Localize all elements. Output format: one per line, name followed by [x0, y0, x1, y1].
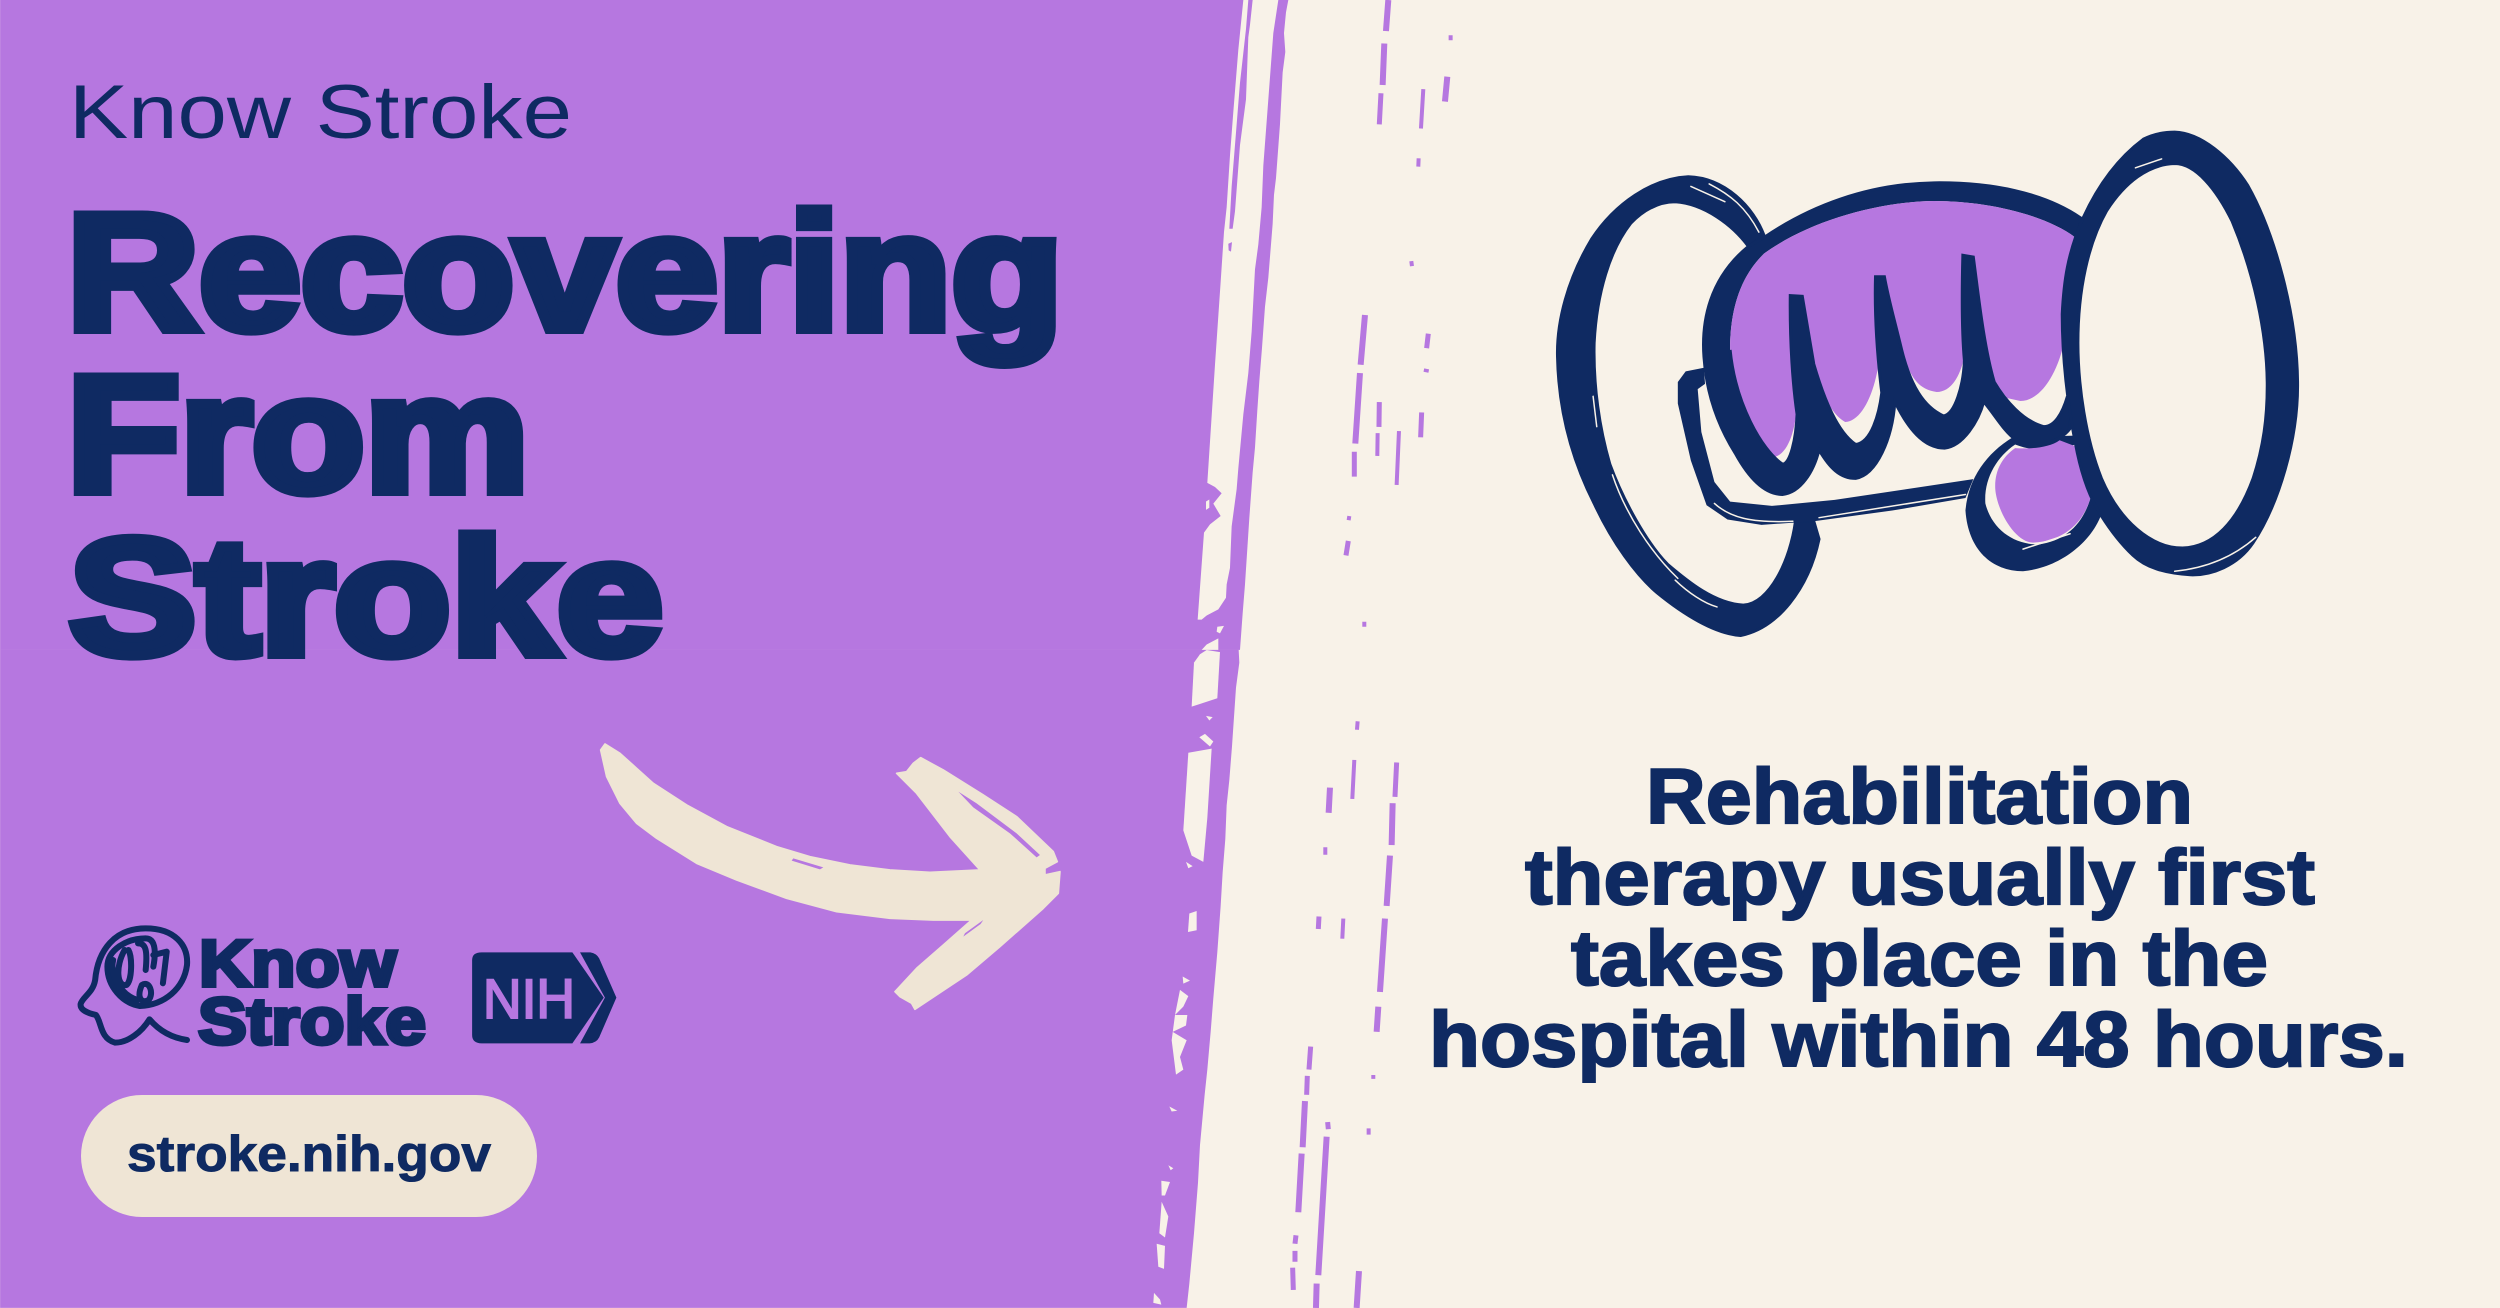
caption: rehabilitation therapy message — [1429, 752, 2408, 1083]
title: Recovering From Stroke: From — [67, 342, 529, 526]
purple brush flecks upper right of divider — [1346, 0, 1451, 627]
logo wordmark — [198, 926, 426, 1058]
panel: purple left background with brushed edge — [0, 0, 1288, 1308]
caption: rehabilitation therapy message: Rehabilitation — [1646, 752, 2193, 840]
url pill: stroke.nih.gov — [127, 1126, 491, 1182]
right weight — [2062, 132, 2298, 575]
purple brush flecks lower right of divider — [1293, 721, 1397, 1308]
thumb — [1965, 436, 2101, 571]
eyebrow: Know Stroke: Know Stroke — [69, 70, 572, 155]
icon: head with scribble brain — [81, 928, 187, 1043]
logo wordmark: Know — [199, 926, 397, 1000]
url pill — [81, 1095, 537, 1217]
logo: NIH — [472, 952, 616, 1043]
title: Recovering From Stroke: Recovering — [67, 180, 1063, 364]
title: Recovering From Stroke: Stroke — [69, 505, 663, 689]
caption: rehabilitation therapy message: therapy usually first — [1525, 833, 2315, 921]
caption: rehabilitation therapy message: hospital within 48 hours. — [1429, 995, 2408, 1083]
hand with fingers — [1704, 183, 2081, 494]
left weight — [1557, 177, 1819, 636]
brushed cream gap in divider — [1153, 0, 1278, 1305]
caption: rehabilitation therapy message: takes place in the — [1571, 914, 2268, 1002]
thin purple brush streak — [1228, 0, 1253, 252]
logo: NIH: NIH — [483, 967, 575, 1030]
logo wordmark: Stroke — [198, 984, 426, 1058]
logo: Know Stroke — [81, 926, 426, 1058]
arrow: brush arrow pointing right — [601, 744, 1060, 1009]
brush texture highlights — [1593, 159, 2256, 607]
title: Recovering From Stroke — [67, 180, 1063, 689]
icon: hand gripping dumbbell — [1557, 132, 2298, 636]
forearm cuff — [1678, 368, 1973, 525]
